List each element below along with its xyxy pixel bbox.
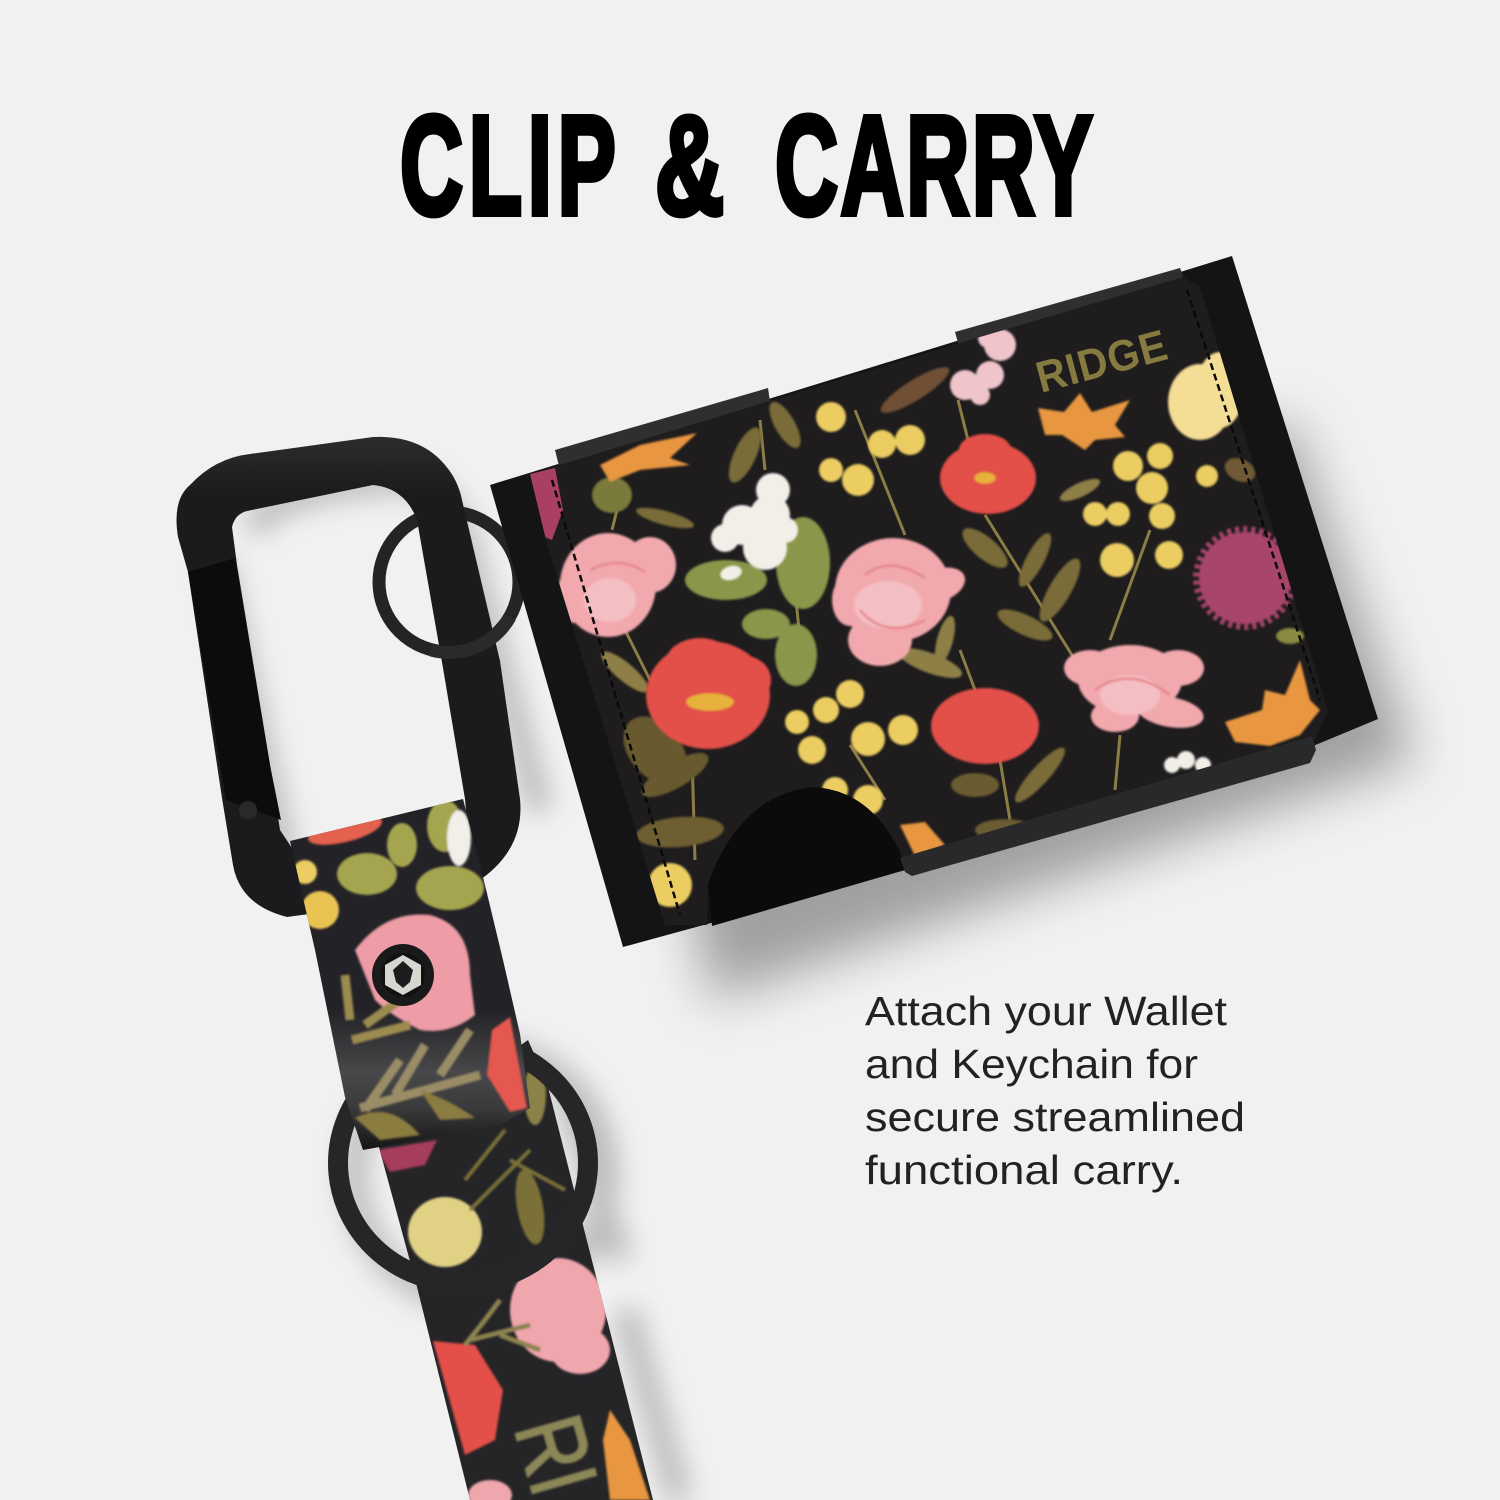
gate sleeve: [188, 558, 281, 820]
card slot: [708, 787, 905, 926]
title: &: [655, 87, 724, 244]
leather panel: [530, 277, 1328, 925]
carabiner: [176, 437, 520, 917]
description text: secure streamlined: [865, 1094, 1245, 1140]
wallet split ring back: [379, 512, 519, 652]
pink flowers: [557, 328, 1206, 733]
maroon edge flower: [530, 468, 563, 540]
stitching: [552, 290, 1320, 915]
description text: and Keychain for: [865, 1041, 1198, 1087]
carabiner and strap shadows: [218, 480, 680, 1500]
title: CARRY: [775, 87, 1095, 244]
clip top right: [955, 268, 1186, 350]
upper strap loop: [290, 799, 530, 1150]
snap button: [372, 944, 434, 1006]
wallet: [490, 256, 1378, 947]
stems: [612, 400, 1150, 860]
title: [400, 87, 1095, 244]
orange flowers: [600, 393, 1320, 856]
upper strap flowers and leaves: [293, 800, 527, 1140]
clip bottom: [900, 736, 1316, 876]
description text: [865, 988, 1245, 1193]
gate pin: [239, 801, 257, 819]
ring over carabiner: [431, 617, 510, 652]
leaves: [592, 360, 1304, 851]
wallet shadow: [640, 420, 1415, 1000]
pale yellow flower: [1168, 352, 1244, 440]
description text: Attach your Wallet: [865, 988, 1228, 1034]
floral print: [530, 290, 1320, 915]
lower strap: [377, 1040, 653, 1500]
lower strap flowers: [377, 1065, 650, 1500]
white blossoms: [711, 473, 1211, 773]
yellow clusters: [648, 402, 1218, 907]
red flowers: [646, 434, 1039, 764]
elastic band: [490, 256, 1378, 947]
maroon dahlia: [1197, 530, 1293, 626]
key ring: [338, 1043, 588, 1283]
title: CLIP: [400, 87, 621, 244]
clip top left: [555, 388, 771, 470]
description text: functional carry.: [865, 1147, 1183, 1193]
Ridge logo: RIDGE: [1031, 321, 1173, 403]
